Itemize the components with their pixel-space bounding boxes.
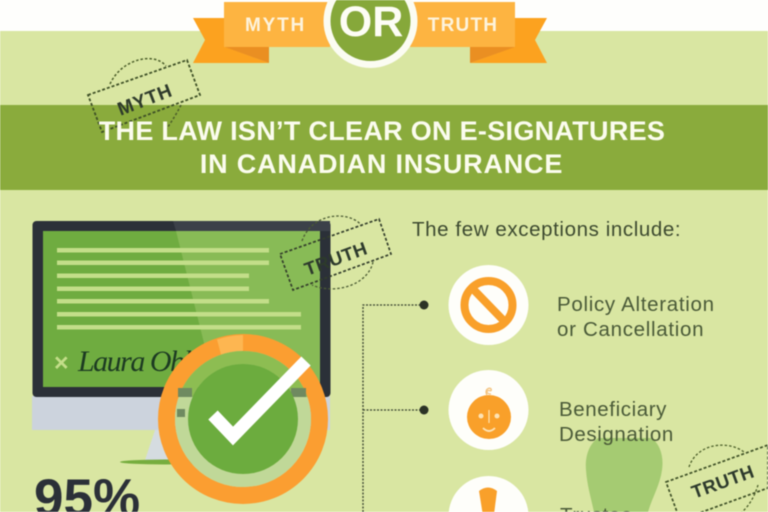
label: beneficiary designation: Designation <box>559 423 674 446</box>
signature mark: × <box>54 349 69 377</box>
monitor stand <box>145 430 176 460</box>
label: policy alteration <box>557 293 715 341</box>
connector lines <box>363 305 424 512</box>
heading: myth statement <box>99 116 665 179</box>
ribbon banner: myth or truth: TRUTH <box>428 15 498 36</box>
stamp: truth on monitor <box>280 216 391 290</box>
icon: prohibited <box>448 265 528 345</box>
heading: myth statement: IN CANADIAN INSURANCE <box>200 149 563 179</box>
badge highlight <box>217 335 243 354</box>
signature: Laura Ohl <box>77 345 192 378</box>
check mark <box>213 361 306 436</box>
inner ring <box>182 358 304 480</box>
stamp: truth lower right <box>666 445 768 512</box>
heading: myth statement: THE LAW ISN’T CLEAR ON E-SIGNATURES <box>99 116 665 146</box>
document lines <box>57 248 301 330</box>
stamp: myth: MYTH <box>115 80 176 120</box>
monitor chin <box>32 396 330 430</box>
stamp: myth <box>88 59 200 132</box>
heading: exceptions: The few exceptions include: <box>412 218 681 241</box>
label: beneficiary designation: Beneficiary <box>559 398 667 421</box>
monitor bezel <box>32 221 330 397</box>
monitor with e-signature <box>32 221 330 464</box>
stamp: truth on monitor: TRUTH <box>301 237 370 280</box>
screen <box>43 231 320 387</box>
ribbon banner: myth or truth: MYTH <box>245 15 306 36</box>
connector dots <box>420 300 428 414</box>
icon: baby <box>448 370 528 450</box>
decorative person figure <box>586 438 663 512</box>
ribbon banner: myth or truth <box>193 0 547 68</box>
ring reflections of bezel <box>177 388 306 417</box>
verified badge <box>166 335 320 496</box>
stamp: truth lower right: TRUTH <box>689 461 757 503</box>
icon: exclamation <box>448 476 528 512</box>
label: beneficiary designation <box>559 398 674 446</box>
label: policy alteration: or Cancellation <box>557 318 704 341</box>
stand shadow <box>120 460 210 464</box>
label: policy alteration: Policy Alteration <box>557 293 715 316</box>
title band <box>0 105 768 190</box>
